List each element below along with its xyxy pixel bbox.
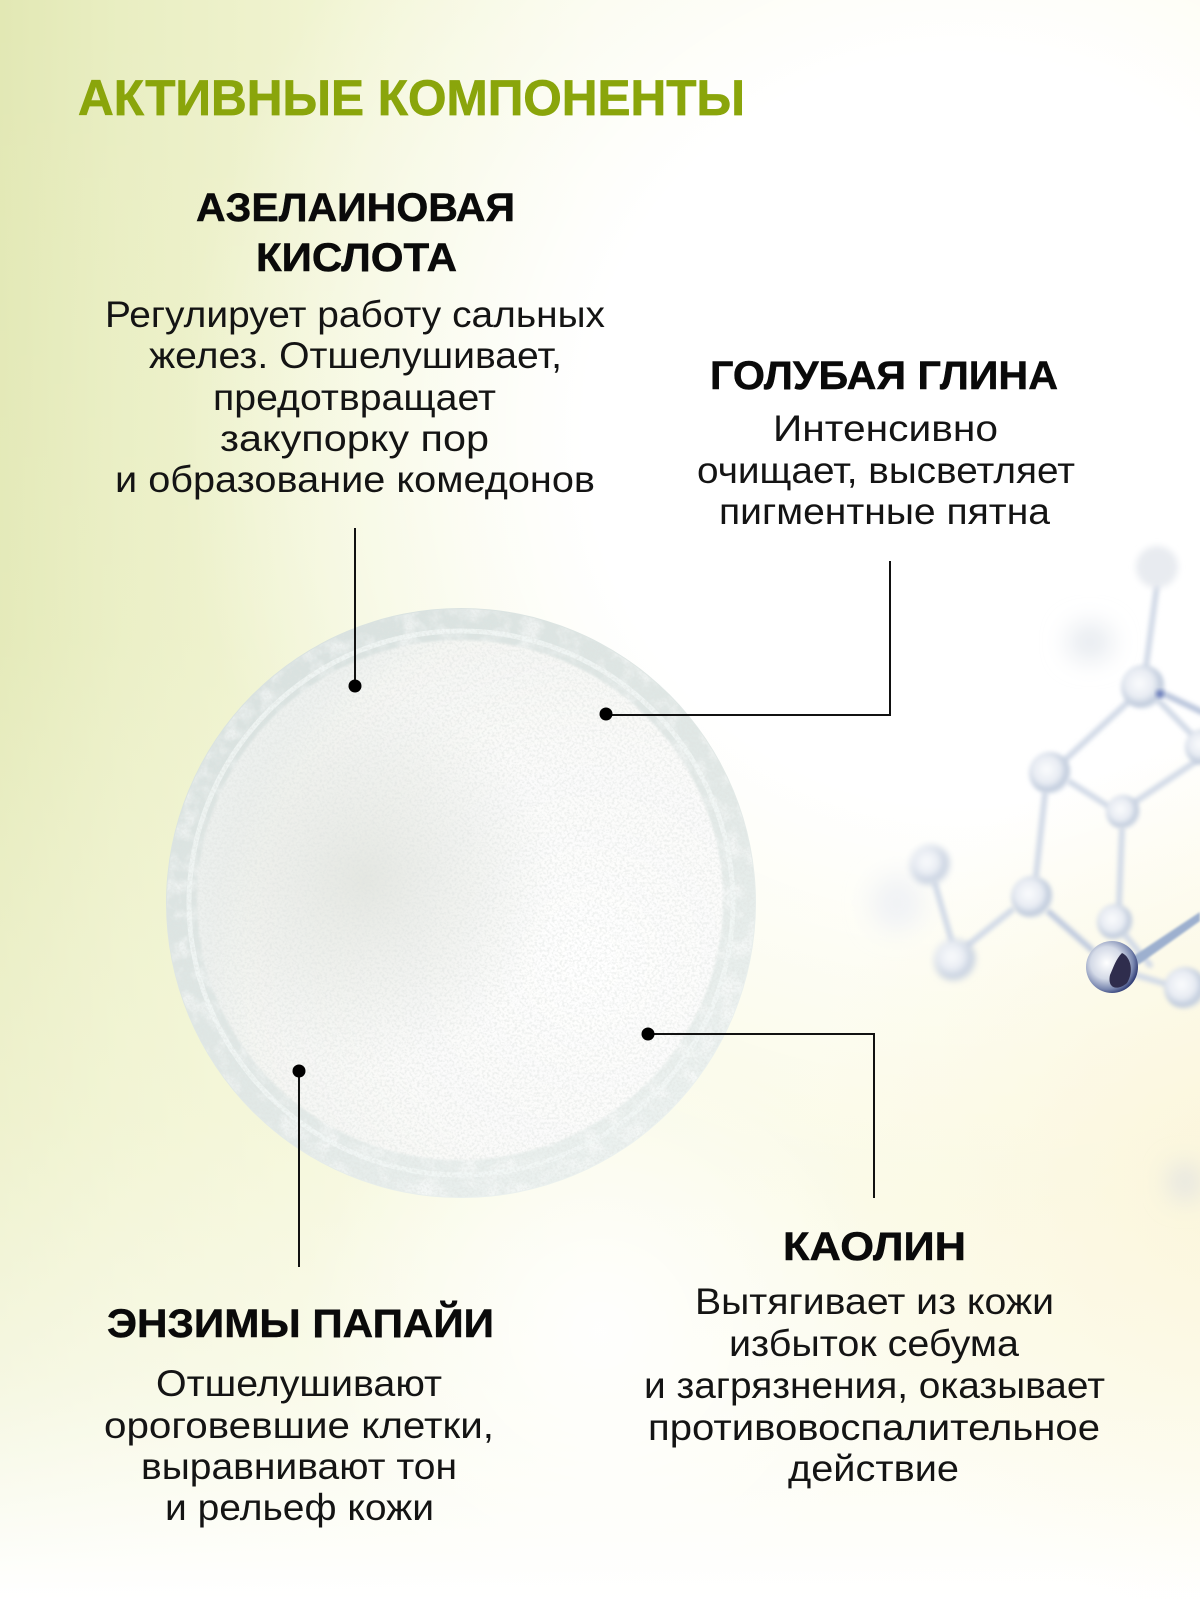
heading: azelaic acid: КИСЛОТА (256, 236, 457, 280)
heading: papain enzymes: ЭНЗИМЫ ПАПАЙИ (107, 1300, 494, 1346)
text: papain enzymes description: ороговевшие клетки, (104, 1405, 494, 1446)
text: kaolin description: противовоспалительное (648, 1407, 1100, 1448)
text: azelaic acid description: закупорку пор (220, 418, 489, 459)
text: blue clay description: пигментные пятна (719, 491, 1050, 532)
text: blue clay description (697, 408, 1075, 532)
text: blue clay description: очищает, высветляет (697, 450, 1075, 491)
text: papain enzymes description (104, 1363, 494, 1528)
text: azelaic acid description: и образование комедонов (115, 459, 595, 500)
text: kaolin description: и загрязнения, оказывает (644, 1365, 1105, 1406)
title: АКТИВНЫЕ КОМПОНЕНТЫ (78, 70, 745, 126)
leader line: papain enzymes (292, 1064, 306, 1267)
text: azelaic acid description: предотвращает (213, 377, 496, 418)
leader line: kaolin (642, 1028, 874, 1198)
illustration: molecule (871, 546, 1200, 1200)
block: kaolin (644, 1225, 1105, 1489)
text: kaolin description: действие (788, 1448, 959, 1489)
text: azelaic acid description: желез. Отшелушивает, (149, 335, 562, 376)
heading: blue clay: ГОЛУБАЯ ГЛИНА (710, 354, 1058, 398)
heading: azelaic acid: АЗЕЛАИНОВАЯ (196, 186, 515, 230)
text: azelaic acid description (105, 294, 606, 500)
block: azelaic acid (105, 186, 606, 500)
text: kaolin description: избыток себума (729, 1323, 1019, 1364)
leader line: blue clay (600, 561, 890, 720)
text: kaolin description: Вытягивает из кожи (695, 1281, 1054, 1322)
illustration: powder dish (166, 608, 756, 1198)
text: papain enzymes description: выравнивают тон (141, 1446, 457, 1487)
text: papain enzymes description: и рельеф кожи (165, 1487, 434, 1528)
text: papain enzymes description: Отшелушивают (156, 1363, 442, 1404)
leader line: azelaic acid (348, 528, 362, 692)
text: kaolin description (644, 1281, 1105, 1489)
heading: kaolin: КАОЛИН (783, 1225, 966, 1269)
text: blue clay description: Интенсивно (773, 408, 998, 449)
block: blue clay (697, 354, 1075, 532)
block: papain enzymes (104, 1300, 494, 1528)
text: azelaic acid description: Регулирует работу сальных (105, 294, 606, 335)
heading: azelaic acid (196, 186, 515, 280)
